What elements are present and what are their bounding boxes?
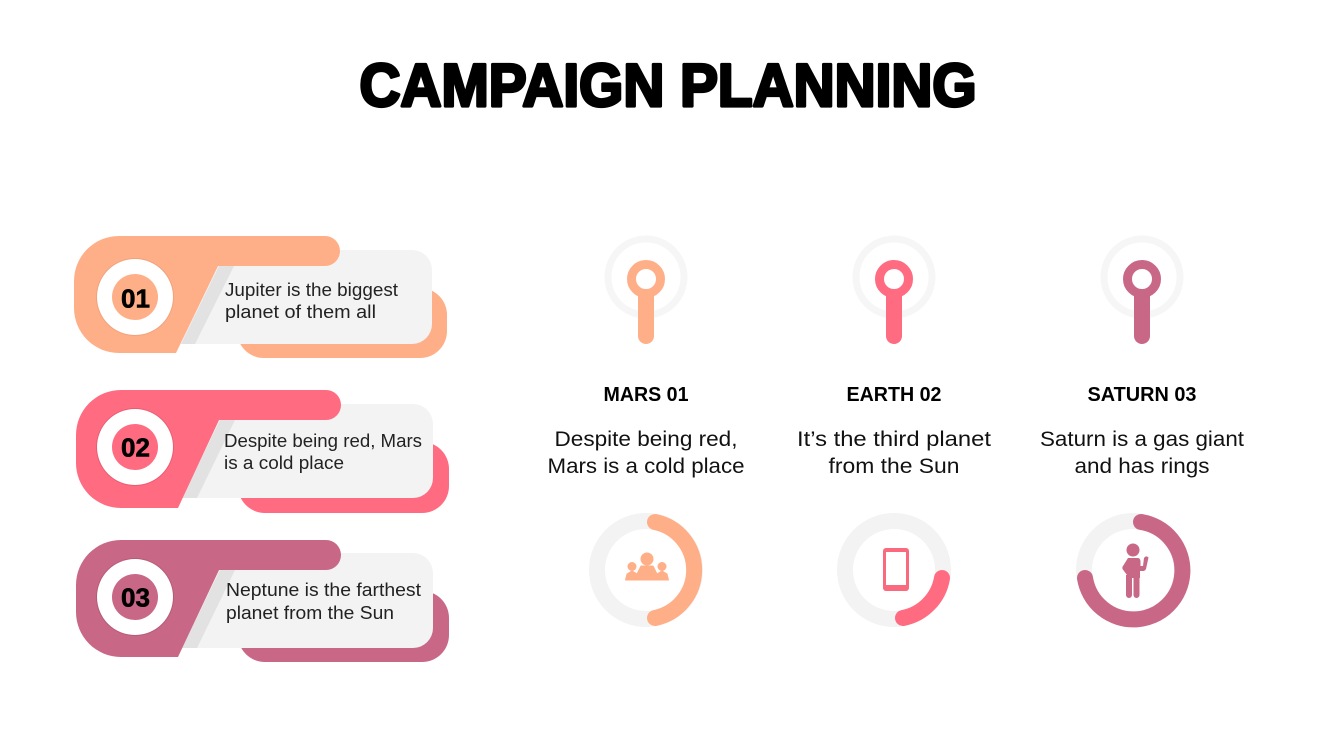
body: Mars — [548, 428, 744, 478]
body: Saturn: Saturn is a gas giant — [1040, 428, 1244, 451]
text 01: planet of them all — [225, 302, 376, 322]
back tab 02 — [238, 442, 449, 513]
number badge 02 — [96, 408, 174, 486]
body: Earth: from the Sun — [828, 455, 960, 478]
donut chart: Mars — [597, 521, 695, 619]
heading: Earth: EARTH 02 — [846, 384, 942, 406]
text 03: Neptune is the farthest — [226, 580, 421, 600]
panel: item 02 — [76, 390, 449, 513]
body: Earth — [797, 428, 991, 478]
icon: smartphone — [883, 548, 909, 591]
pin icon: Earth — [856, 239, 932, 344]
card shadow strip 03 — [182, 570, 235, 648]
number badge 03: 03 — [121, 582, 150, 612]
donut chart: Earth — [845, 521, 943, 619]
column: Saturn — [1040, 239, 1244, 619]
body: Saturn: and has rings — [1074, 455, 1210, 478]
text 01: Jupiter is the biggest — [225, 280, 398, 300]
icon: person waving — [1122, 544, 1148, 598]
text 01 — [225, 280, 398, 322]
card 01 — [181, 250, 432, 344]
text 02: is a cold place — [224, 453, 344, 473]
number badge 02: 02 — [121, 432, 150, 462]
card shadow strip 01 — [181, 266, 234, 344]
ribbon 03 — [76, 540, 341, 657]
ribbon 02 — [76, 390, 341, 508]
title: CAMPAIGN PLANNING — [360, 52, 976, 119]
body: Saturn — [1040, 428, 1244, 478]
body: Mars: Despite being red, — [554, 428, 738, 451]
body: Earth: It’s the third planet — [797, 428, 991, 451]
heading: Mars: MARS 01 — [604, 384, 688, 406]
ribbon 01 — [74, 236, 340, 353]
icon: audience — [626, 553, 668, 580]
heading: Saturn: SATURN 03 — [1088, 384, 1196, 406]
column: Earth — [797, 239, 991, 619]
card 02 — [183, 404, 433, 498]
text 02: Despite being red, Mars — [224, 431, 422, 451]
panel: item 03 — [76, 540, 449, 662]
card 03 — [183, 553, 433, 648]
back tab 01 — [237, 288, 447, 358]
text 03: planet from the Sun — [226, 603, 394, 623]
text 02 — [224, 431, 422, 473]
back tab 03 — [238, 591, 449, 662]
text 03 — [226, 580, 421, 623]
pin icon: Saturn — [1104, 239, 1180, 344]
number badge 01 — [96, 258, 174, 336]
panel: item 01 — [74, 236, 447, 358]
number badge 01: 01 — [121, 284, 150, 314]
pin icon: Mars — [608, 239, 684, 344]
number badge 03 — [96, 558, 174, 636]
donut chart: Saturn — [1084, 521, 1182, 619]
body: Mars: Mars is a cold place — [548, 455, 744, 478]
card shadow strip 02 — [182, 420, 235, 498]
column: Mars — [548, 239, 744, 619]
